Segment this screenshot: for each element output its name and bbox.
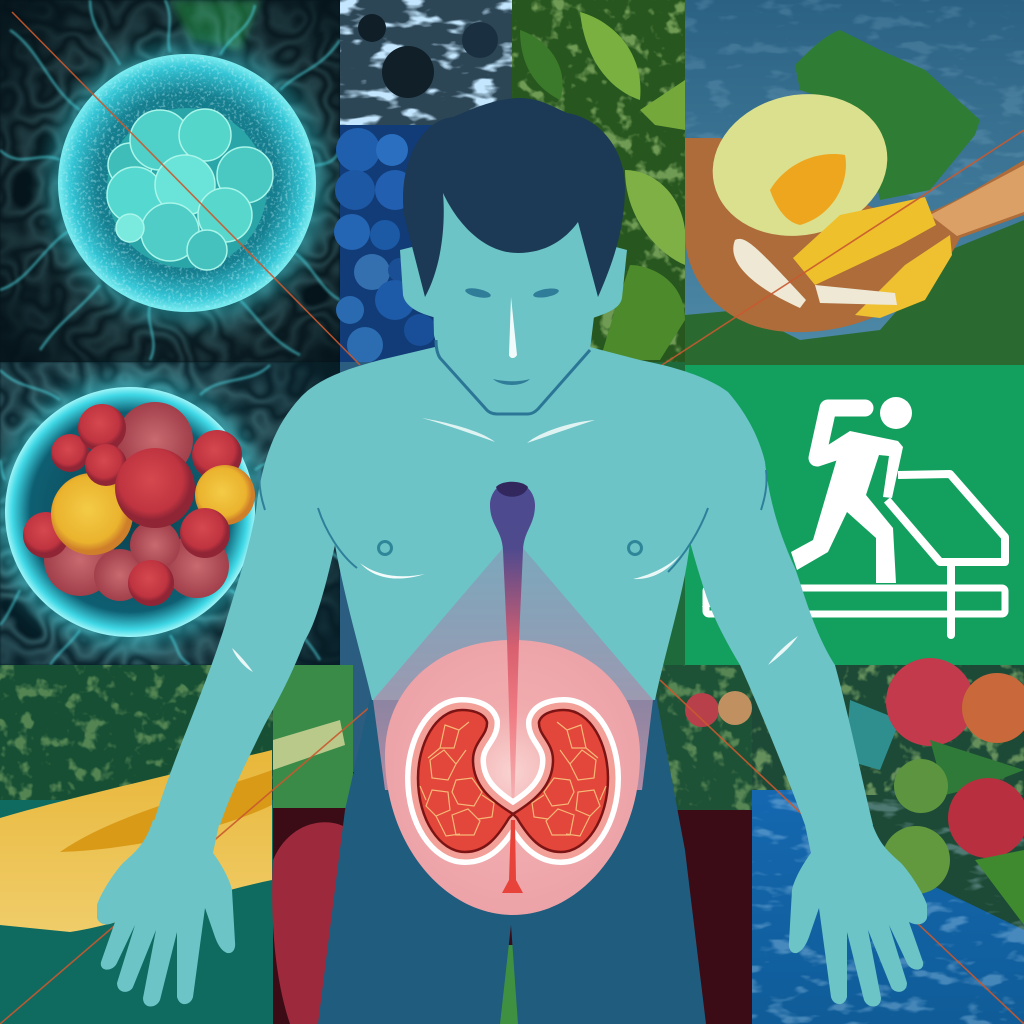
pink circle bbox=[385, 640, 640, 915]
panel: green leaves bbox=[512, 0, 685, 365]
panel: water texture bbox=[340, 0, 512, 125]
tendrils bbox=[0, 365, 340, 665]
panel: maroon fruit bbox=[272, 808, 753, 1024]
collarbones bbox=[422, 418, 595, 443]
panel: cell with cyan glow bbox=[0, 0, 340, 362]
lower tube bbox=[502, 820, 523, 893]
panel: green exercise sign bbox=[685, 365, 1024, 665]
panel: citrus on wooden board bbox=[685, 0, 1024, 365]
jaw line bbox=[436, 340, 590, 414]
panel: leaves behind hip bbox=[273, 665, 353, 810]
figure: human body bbox=[97, 98, 927, 1024]
coloured spheres bbox=[23, 402, 255, 606]
ears bbox=[400, 240, 627, 318]
panel: cell with coloured spheres bbox=[0, 362, 340, 665]
mouth bbox=[493, 379, 530, 385]
tendrils bbox=[0, 0, 340, 360]
hair bbox=[403, 98, 625, 297]
face bbox=[430, 180, 600, 414]
cell cluster bbox=[107, 108, 273, 270]
panel: banana and foliage bbox=[0, 665, 273, 1024]
wooden board bbox=[685, 138, 1024, 332]
chest lines bbox=[232, 470, 798, 672]
orange disc bbox=[962, 673, 1024, 743]
tube bbox=[490, 482, 535, 815]
lower greens bbox=[685, 220, 1024, 365]
strawberry bbox=[886, 658, 974, 746]
funnel bbox=[373, 548, 653, 790]
icon: person on treadmill bbox=[702, 397, 1005, 635]
kidneys bbox=[418, 710, 608, 852]
torso and arms bbox=[153, 347, 873, 825]
left hand bbox=[97, 820, 235, 1007]
organ callout: stomach to kidneys bbox=[373, 482, 653, 915]
panel: dark leaves by thigh bbox=[655, 665, 752, 810]
fill behind torso bbox=[340, 362, 685, 772]
panel: blue berries bbox=[334, 125, 440, 365]
green limes bbox=[894, 759, 948, 813]
halved fruit bbox=[699, 78, 901, 252]
right hand bbox=[789, 820, 927, 1007]
tube opening bbox=[496, 482, 528, 497]
mango slices bbox=[793, 197, 952, 318]
nose highlight bbox=[509, 297, 517, 358]
kidney veins bbox=[420, 722, 606, 836]
white root slices bbox=[733, 239, 897, 308]
eyes bbox=[464, 286, 559, 300]
leafy greens bbox=[930, 740, 1024, 795]
greens bbox=[795, 30, 980, 200]
panel: fruit, vegetables and water bbox=[752, 658, 1024, 1024]
red berry bbox=[948, 778, 1024, 858]
pants bbox=[318, 690, 706, 1024]
